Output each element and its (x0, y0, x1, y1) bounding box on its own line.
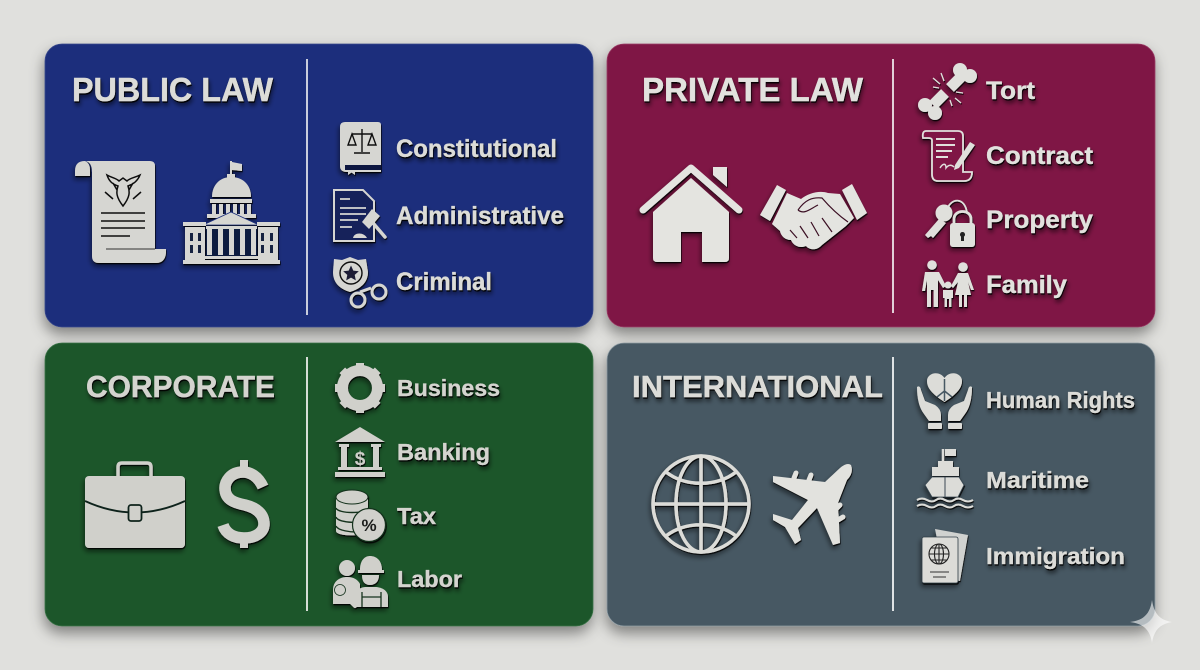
item: banking (335, 427, 490, 477)
label: labor: Labor (397, 566, 462, 592)
panel: private law (607, 44, 1155, 327)
item: administrative (334, 190, 564, 241)
item: immigration (922, 529, 1125, 583)
icon: workers and wrench (333, 556, 388, 607)
panel: international (607, 343, 1155, 626)
card: international (607, 343, 1155, 626)
icon: ship (917, 449, 973, 508)
icon: coins and percent: % (361, 516, 377, 535)
icon: document and gavel (334, 190, 385, 241)
divider (892, 357, 894, 611)
icon: gear (335, 363, 385, 413)
item: labor (333, 556, 462, 607)
icon: handshake (760, 184, 867, 249)
label: criminal: Criminal (396, 268, 492, 296)
icon: passports (922, 529, 968, 583)
item: family (922, 260, 1067, 307)
item: maritime (917, 449, 1089, 508)
icon: bank building (335, 427, 385, 477)
label: banking: Banking (397, 439, 490, 465)
label: constitutional: Constitutional (396, 135, 557, 163)
heading: corporate: CORPORATE (86, 369, 275, 404)
icon: bank building: $ (355, 449, 366, 470)
card: corporate (45, 343, 593, 626)
label: tort: Tort (986, 77, 1036, 105)
icon: contract scroll and pen (923, 131, 975, 181)
panel: public law (45, 44, 593, 327)
icon: broken bone (918, 63, 977, 120)
item: human rights (917, 373, 1135, 429)
divider (892, 59, 894, 313)
label: contract: Contract (986, 142, 1094, 170)
icon: house (643, 167, 739, 262)
icon: scroll with eagle seal (75, 161, 166, 263)
divider (306, 59, 308, 315)
label: administrative: Administrative (396, 202, 564, 230)
card: private law (607, 44, 1155, 327)
icon: law book (340, 122, 381, 175)
icon: hands holding heart (917, 373, 972, 429)
label: family: Family (986, 271, 1067, 299)
heading: public law: PUBLIC LAW (72, 71, 274, 108)
divider (306, 357, 308, 611)
icon: dollar sign (223, 460, 264, 548)
card: public law (45, 44, 593, 327)
icon: badge and handcuffs (333, 257, 386, 307)
item: constitutional (340, 122, 557, 175)
icon: key and padlock (925, 201, 975, 247)
item: tort (918, 63, 1036, 120)
icon: briefcase (85, 463, 185, 548)
panel: corporate (45, 343, 593, 626)
label: maritime: Maritime (986, 467, 1089, 493)
label: human rights: Human Rights (986, 387, 1135, 413)
icon: sparkle watermark (1130, 600, 1172, 643)
item: business (335, 363, 500, 413)
icon: capitol building (183, 161, 280, 264)
heading: international: INTERNATIONAL (632, 369, 883, 404)
label: tax: Tax (397, 503, 436, 529)
item: property (925, 201, 1093, 247)
label: business: Business (397, 375, 500, 401)
icon: family figures (922, 260, 974, 307)
icon: globe (653, 456, 749, 552)
heading: private law: PRIVATE LAW (642, 71, 864, 108)
item: criminal (333, 257, 492, 307)
item: contract (923, 131, 1094, 181)
item: tax (336, 490, 436, 542)
label: property: Property (986, 206, 1093, 234)
icon: airplane (773, 464, 852, 545)
label: immigration: Immigration (986, 543, 1125, 569)
